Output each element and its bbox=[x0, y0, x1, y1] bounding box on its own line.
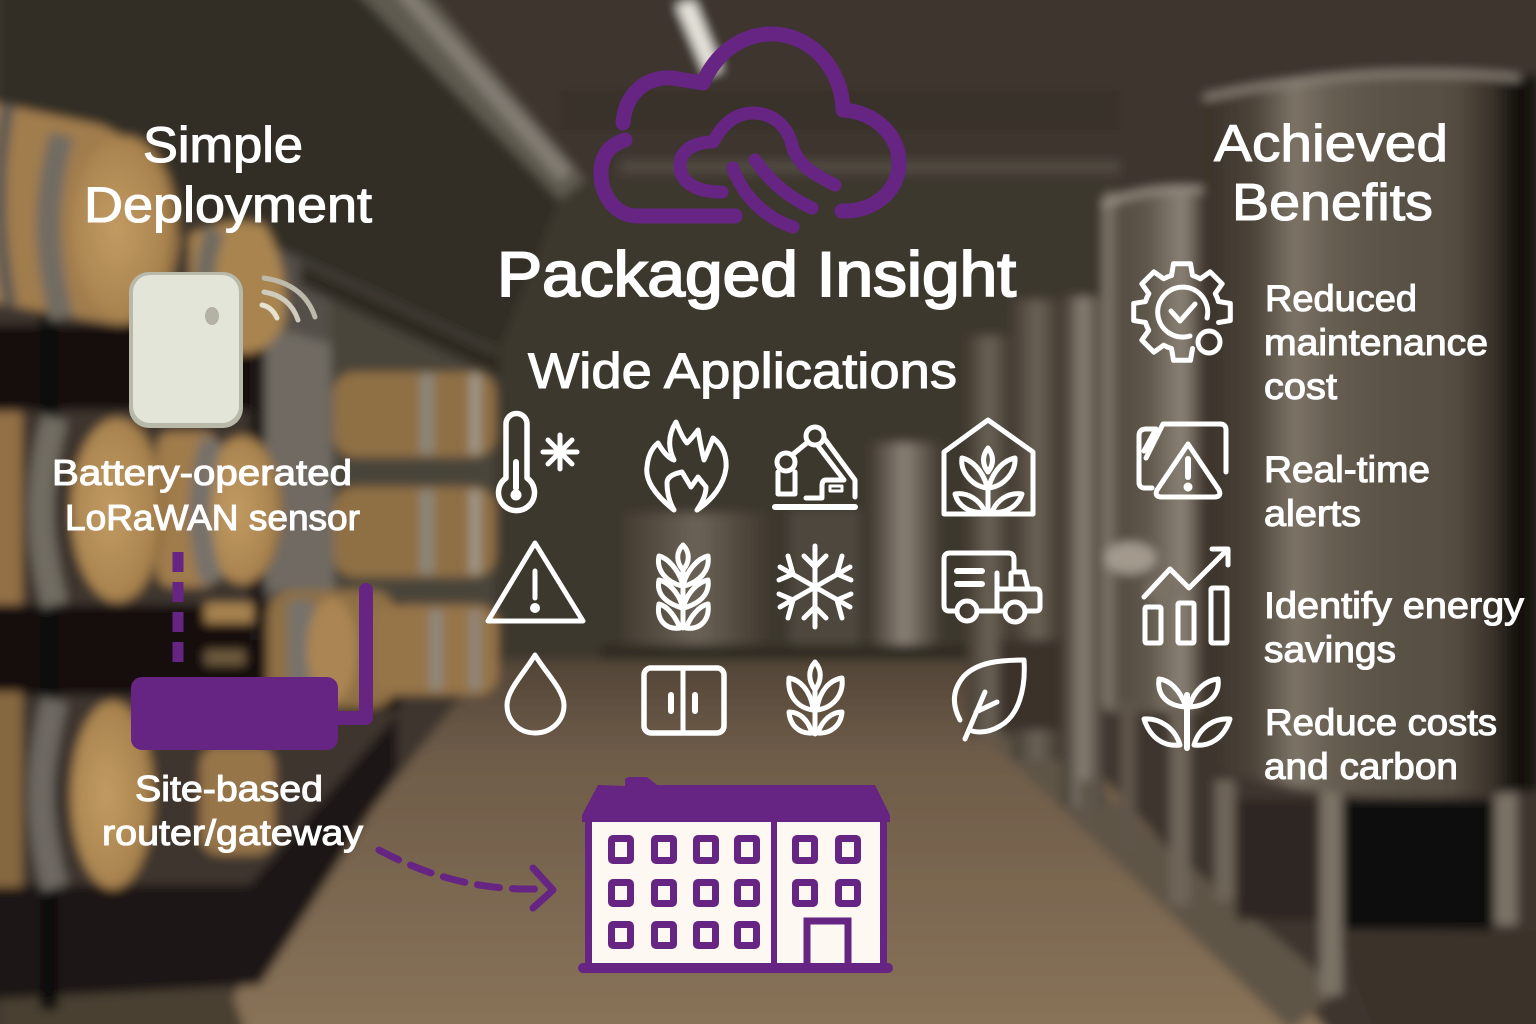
dashed link: sensor to gateway bbox=[172, 552, 184, 666]
title: Achieved Benefits bbox=[1214, 115, 1448, 232]
label: reduced maintenance cost: Reduced bbox=[1265, 278, 1417, 319]
label: reduce costs and carbon: and carbon bbox=[1264, 746, 1458, 787]
racks bbox=[0, 325, 265, 410]
top row barrels bbox=[190, 222, 286, 353]
label: real-time alerts: Real-time bbox=[1264, 449, 1430, 490]
icon: plant sprig bbox=[789, 662, 842, 734]
bottom row barrels bbox=[200, 745, 275, 855]
icon: delivery truck bbox=[944, 553, 1040, 622]
icon: leaf bbox=[954, 660, 1024, 739]
icon: wheat bbox=[658, 545, 708, 628]
label: site-based router/gateway: Site-based bbox=[135, 768, 323, 809]
icon: wireless signal waves bbox=[262, 278, 315, 320]
title: Simple Deployment: Deployment bbox=[84, 177, 372, 233]
icon: fire bbox=[647, 422, 726, 510]
title: Achieved Benefits: Achieved bbox=[1214, 115, 1448, 173]
heading: Packaged Insight: Packaged Insight bbox=[497, 240, 1017, 310]
icon: greenhouse plant bbox=[944, 420, 1033, 514]
label: site-based router/gateway bbox=[102, 768, 363, 853]
label: reduced maintenance cost: maintenance bbox=[1264, 322, 1488, 363]
label: identify energy savings: Identify energy bbox=[1264, 585, 1525, 626]
icon: warning triangle bbox=[488, 543, 583, 621]
icon: double doors bbox=[644, 668, 724, 733]
title: Achieved Benefits: Benefits bbox=[1232, 174, 1433, 232]
label: site-based router/gateway: router/gateway bbox=[102, 812, 363, 853]
title: Simple Deployment bbox=[84, 117, 372, 233]
icon: robot arm bbox=[775, 427, 855, 507]
icon: snowflake bbox=[779, 546, 851, 627]
label: real-time alerts: alerts bbox=[1264, 493, 1361, 534]
label: identify energy savings bbox=[1264, 585, 1525, 670]
label: battery-operated sensor: LoRaWAN sensor bbox=[65, 497, 360, 538]
label: real-time alerts bbox=[1264, 449, 1430, 534]
icon: water drop bbox=[507, 655, 564, 733]
icon: router gateway bbox=[131, 590, 366, 750]
icon: seedling bbox=[1144, 679, 1230, 748]
icon: rising chart bbox=[1144, 549, 1228, 643]
label: reduced maintenance cost: cost bbox=[1264, 366, 1338, 407]
arrow: gateway to building bbox=[379, 850, 553, 908]
middle row barrels bbox=[157, 432, 217, 587]
icon: thermometer and cold bbox=[498, 414, 577, 511]
label: battery-operated sensor bbox=[52, 452, 360, 538]
far barrels bbox=[333, 372, 496, 457]
label: battery-operated sensor: Battery-operated bbox=[52, 452, 352, 493]
title: Simple Deployment: Simple bbox=[143, 117, 303, 173]
icon: LoRaWAN sensor device bbox=[129, 272, 243, 428]
icon: alert frame bbox=[1139, 424, 1226, 497]
icon: cloud logo bbox=[601, 34, 899, 227]
label: identify energy savings: savings bbox=[1264, 629, 1396, 670]
floor bbox=[200, 660, 1340, 1024]
label: reduce costs and carbon: Reduce costs bbox=[1265, 702, 1497, 743]
heading: Wide Applications: Wide Applications bbox=[528, 343, 957, 399]
label: reduced maintenance cost bbox=[1264, 278, 1488, 407]
icon: building bbox=[578, 777, 893, 973]
label: reduce costs and carbon bbox=[1264, 702, 1497, 787]
icon: gear with check bbox=[1134, 264, 1230, 360]
